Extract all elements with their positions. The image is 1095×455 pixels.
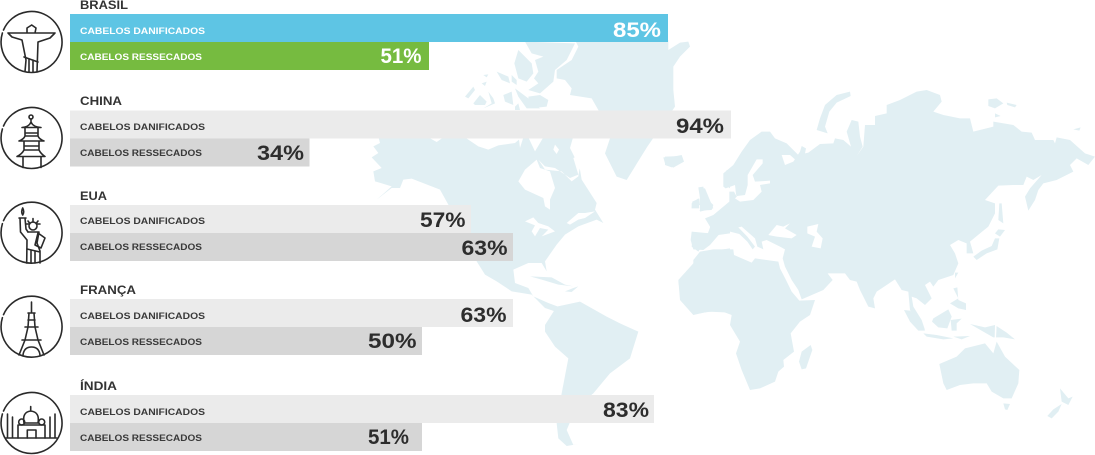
heading: Franca: FRANÇA	[80, 283, 136, 297]
bar: India cabelos ressecados 51%	[70, 423, 422, 451]
bar: Franca cabelos ressecados 50%	[70, 327, 422, 355]
heading: India: ÍNDIA	[80, 378, 117, 393]
icon: Taj Mahal	[1, 392, 62, 453]
EUA group	[1, 189, 513, 263]
bar: China cabelos danificados 94%: 94%	[676, 115, 724, 138]
heading: China: CHINA	[80, 94, 122, 108]
bar: India cabelos ressecados 51%: 51%	[368, 426, 409, 449]
bar: Brasil cabelos danificados 85%: 85%	[613, 19, 661, 42]
icon: Estatua da Liberdade	[1, 202, 62, 263]
bar: China cabelos danificados 94%	[70, 110, 731, 138]
bar: Franca cabelos ressecados 50%: CABELOS RESSECADOS	[80, 337, 202, 348]
bar: Brasil cabelos danificados 85%: CABELOS DANIFICADOS	[80, 26, 205, 37]
bar: Brasil cabelos ressecados 51%: 51%	[380, 45, 422, 68]
Brasil group	[1, 0, 668, 72]
China group	[1, 94, 731, 168]
heading: EUA: EUA	[80, 189, 107, 203]
bar: EUA cabelos ressecados 63%: CABELOS RESSECADOS	[80, 242, 202, 253]
bar: Franca cabelos ressecados 50%: 50%	[368, 330, 417, 353]
bar: Franca cabelos danificados 63%: CABELOS DANIFICADOS	[80, 311, 205, 322]
bar: EUA cabelos ressecados 63%	[70, 233, 513, 261]
bar: Franca cabelos danificados 63%: 63%	[460, 304, 507, 327]
bar: EUA cabelos ressecados 63%: 63%	[462, 237, 508, 260]
icon: pagode	[1, 107, 62, 168]
bar: Brasil cabelos ressecados 51%: CABELOS RESSECADOS	[80, 52, 202, 63]
world map background	[372, 40, 1095, 446]
bar: EUA cabelos danificados 57%	[70, 205, 471, 233]
bar: EUA cabelos danificados 57%: 57%	[420, 209, 466, 232]
bar: India cabelos ressecados 51%: CABELOS RESSECADOS	[80, 433, 202, 444]
bar: Brasil cabelos danificados 85%	[70, 14, 668, 42]
India group	[1, 378, 654, 453]
bar: China cabelos danificados 94%: CABELOS DANIFICADOS	[80, 122, 205, 133]
Franca group	[1, 283, 513, 357]
bar: China cabelos ressecados 34%: 34%	[257, 142, 304, 165]
icon: Cristo Redentor	[1, 11, 62, 72]
bar: India cabelos danificados 83%: 83%	[603, 399, 649, 422]
bar: Franca cabelos danificados 63%	[70, 299, 513, 327]
bar: India cabelos danificados 83%	[70, 395, 654, 423]
bar: China cabelos ressecados 34%: CABELOS RESSECADOS	[80, 148, 202, 159]
bar: China cabelos ressecados 34%	[70, 138, 310, 166]
bar: Brasil cabelos ressecados 51%	[70, 42, 429, 70]
bar: India cabelos danificados 83%: CABELOS DANIFICADOS	[80, 407, 205, 418]
bar: EUA cabelos danificados 57%: CABELOS DANIFICADOS	[80, 216, 205, 227]
icon: Torre Eiffel	[1, 296, 62, 357]
